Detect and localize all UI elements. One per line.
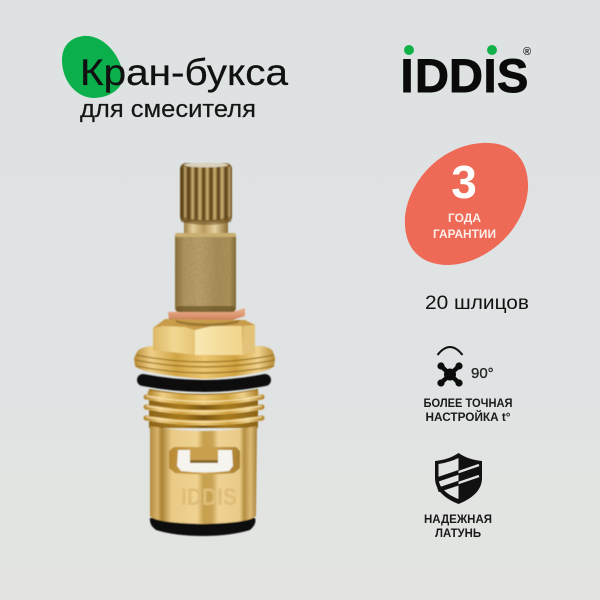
warranty text: ГОДА [448,211,481,225]
copper plate [168,308,245,323]
title block [62,36,288,123]
icon: cross handle [437,362,463,387]
caption line 2: НАСТРОЙКА t° [426,409,511,424]
green blob accent [62,36,123,98]
rubber o-ring top [143,380,265,386]
logo wordmark: IDDIS [400,49,528,102]
IDDIS logo [400,45,531,102]
label 90 degrees: 90° [471,365,494,382]
red blob [405,143,528,265]
title: Кран-букса [80,52,288,93]
logo green dot right [487,45,497,55]
warranty text line 2: ГАРАНТИИ [433,227,496,241]
feature: reliable brass [424,453,492,540]
icon: shield [435,453,482,504]
warranty badge [405,143,528,265]
feature: splines: 20 шлицов [425,293,529,314]
engraved logo: IDDIS [181,484,237,511]
feature: rotation 90 degrees [424,347,512,424]
caption line 2: ЛАТУНЬ [435,526,481,540]
caption: НАДЕЖНАЯ [424,512,492,526]
product photo: cartridge [134,163,275,536]
hex nut [153,319,255,355]
icon: rotation arc [438,347,462,355]
upper cylinder [175,233,236,312]
cartridge body [150,426,257,536]
flange [134,346,275,379]
registered mark: ® [523,46,531,58]
water window [169,447,240,474]
caption: БОЛЕЕ ТОЧНАЯ [424,396,512,410]
logo green dot left [404,45,414,55]
subtitle: для смесителя [80,96,256,123]
threaded section [146,389,262,428]
spline stem [180,163,232,236]
rubber o-ring bottom [150,518,255,536]
number 3: 3 [451,156,477,208]
